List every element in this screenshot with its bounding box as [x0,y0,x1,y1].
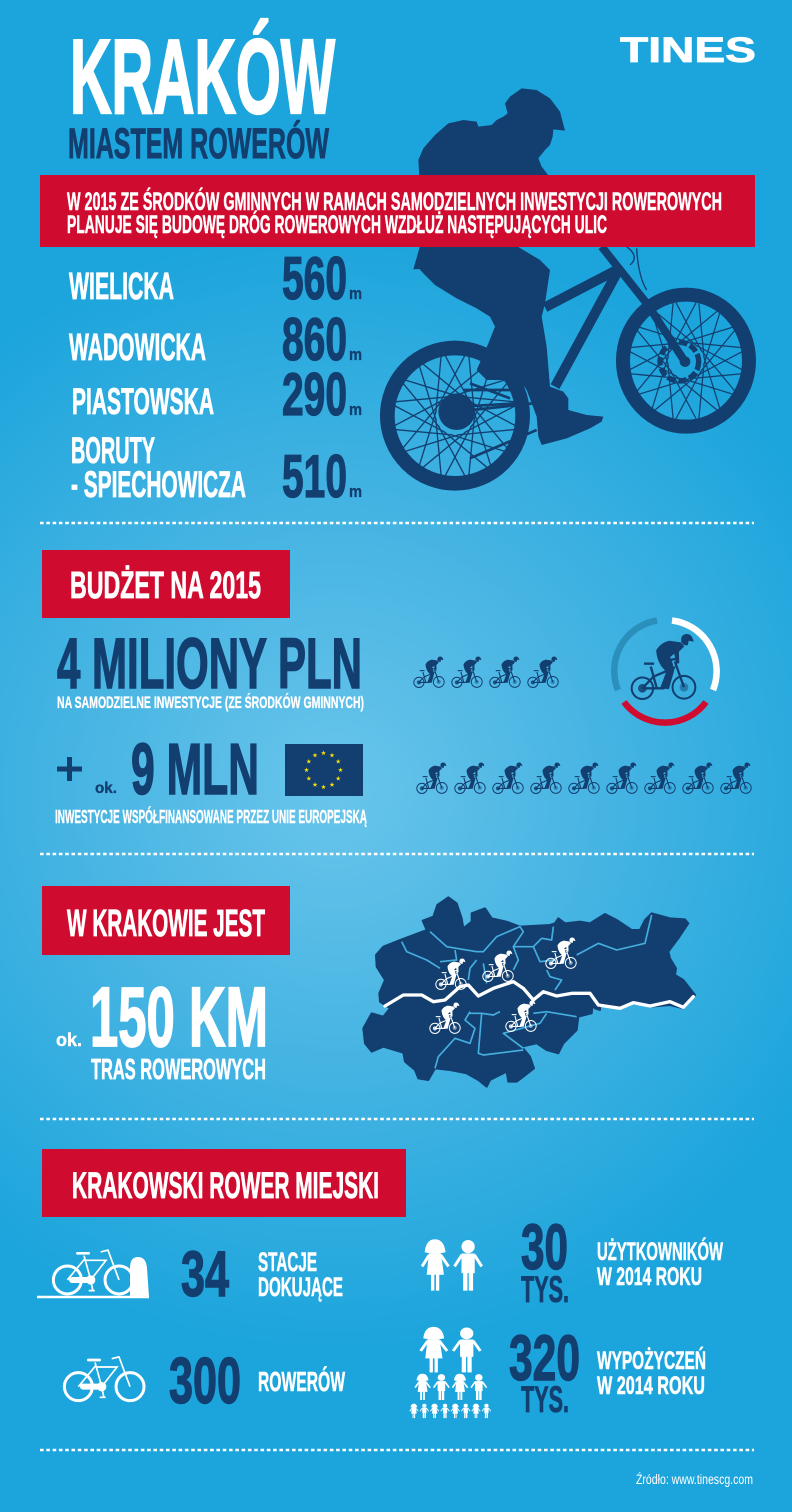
heading: budget [42,550,290,618]
length: 290 m: 290 [282,361,347,428]
icon: plus [57,757,82,781]
icon: two people [422,1239,482,1291]
icon: cyclist in ring [614,620,717,723]
length: 860 m: 860 [282,306,347,373]
caption: own funds: NA SAMODZIELNE INWESTYCJE (ZE ŚRODKÓW GMINNYCH) [57,693,364,712]
street: Boruty-Spiechowicza: - SPIECHOWICZA [71,464,246,505]
rear wheel [387,348,523,483]
map cyclists [430,937,576,1034]
heading: city bike [42,1149,406,1217]
label: bikes: ROWERÓW [258,1366,345,1397]
source: Źródło: www.tinescg.com [636,1472,753,1487]
label: rentals in 2014 [597,1346,706,1400]
street: Piastowska: PIASTOWSKA [72,381,214,422]
figure: 30 thousand: 30 [521,1211,568,1283]
figure: 30 thousand: TYS. [521,1269,569,1310]
label: rentals in 2014: WYPOŻYCZEŃ [597,1346,706,1375]
map: Kraków districts [363,897,695,1087]
length: 510 m: 510 [282,443,347,510]
length: 860 m: m [349,345,362,364]
rider torso and helmet [418,88,565,177]
bike frame [457,247,685,458]
pictogram row: 4 cyclists [414,656,558,688]
figure: 30 thousand [521,1211,569,1310]
caption: bike routes: TRAS ROWEROWYCH [91,1054,266,1086]
label: ok.: ok. [95,780,117,797]
label: users in 2014: W 2014 ROKU [597,1263,702,1291]
subtitle: MIASTEM ROWERÓW [68,119,329,168]
front wheel [623,295,749,427]
logo: Tines: TINES [620,31,756,70]
rider legs and shoe [413,246,603,445]
length: 560 m: m [349,284,362,303]
figure: 34: 34 [181,1238,229,1310]
label: docking stations: STACJE [258,1247,317,1277]
street: Wadowicka: WADOWICKA [69,327,206,369]
label: ok.: ok. [56,1029,82,1050]
figure: 150 km: 150 KM [90,970,268,1064]
label: users in 2014 [597,1236,723,1291]
heading: city bike: KRAKOWSKI ROWER MIEJSKI [72,1165,379,1206]
caption: EU co-financing: INWESTYCJE WSPÓŁFINANSOWANE PRZEZ UNIE EUROPEJSKĄ [55,806,367,827]
icon: bike at dock [37,1250,149,1297]
heading: in Kraków: W KRAKOWIE JEST [67,903,265,945]
icon: bike [64,1357,144,1401]
icon: group of people [410,1327,491,1418]
label: docking stations: DOKUJĄCE [258,1272,343,1302]
heading: budget: BUDŻET NA 2015 [70,565,261,607]
length: 290 m: m [349,400,362,419]
label: docking stations [258,1247,343,1302]
heading: in Kraków [42,886,290,955]
length: 510 m: m [349,482,362,501]
street: Wielicka: WIELICKA [69,266,174,308]
illustration: cyclist silhouette [387,88,749,483]
length: 560 m: 560 [282,245,347,312]
street list [69,245,362,510]
figure: 320 thousand: TYS. [521,1379,569,1420]
figure: 320 thousand [509,1322,580,1420]
title: Kraków: KRAKÓW [70,18,335,136]
banner: intro [40,175,755,247]
label: rentals in 2014: W 2014 ROKU [597,1372,705,1400]
street: Boruty-Spiechowicza: BORUTY [71,430,155,471]
pictogram row: 9 cyclists [417,762,751,794]
figure: 320 thousand: 320 [509,1322,580,1394]
figure: 300: 300 [169,1344,241,1417]
figure: 4 million PLN: 4 MILIONY PLN [57,625,362,704]
icon: EU flag [285,744,363,796]
figure: 9 MLN: 9 MLN [131,730,259,810]
street: Boruty-Spiechowicza [71,430,246,505]
